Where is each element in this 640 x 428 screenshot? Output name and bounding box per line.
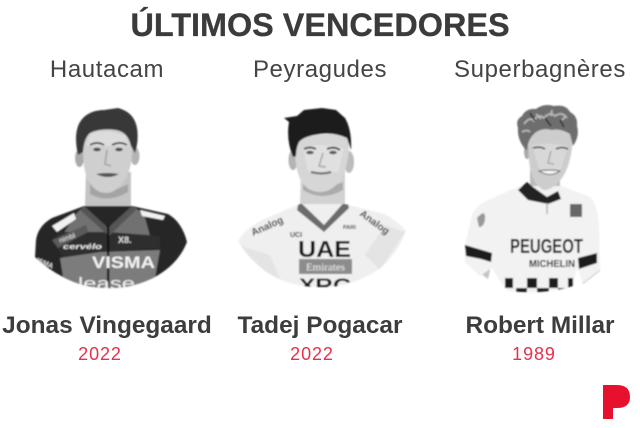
place label: Hautacam: Hautacam [50, 56, 164, 83]
portrait: Tadej Pogacar: Emirates [306, 262, 345, 274]
portrait: Tadej Pogacar: PARI [343, 225, 356, 231]
logo: red P mark [603, 385, 630, 419]
portrait: Robert Millar: PEUGEOT [510, 236, 583, 258]
portrait: Jonas Vingegaard: ISMA [35, 257, 54, 270]
year: 1989: 1989 [512, 344, 556, 364]
place label: Peyragudes: Peyragudes [253, 56, 387, 83]
portrait: Jonas Vingegaard: cervélo [63, 242, 103, 251]
portrait: Tadej Pogacar: Analog [250, 215, 285, 239]
winner name: Tadej Pogacar: Tadej Pogacar [238, 312, 402, 339]
portrait: Jonas Vingegaard: nimbl [58, 232, 77, 245]
portraits [34, 104, 630, 419]
portrait: Tadej Pogacar: UCI [290, 232, 302, 239]
year: 2022: 2022 [290, 344, 334, 364]
portrait: Jonas Vingegaard: X8. [118, 235, 132, 245]
year: 2022: 2022 [78, 344, 122, 364]
portrait: Jonas Vingegaard [30, 108, 195, 295]
portrait: Tadej Pogacar: UAE [298, 236, 351, 262]
portrait: Jonas Vingegaard: VISMA [92, 253, 155, 272]
place label: Superbagnères: Superbagnères [454, 56, 626, 83]
winner name: Robert Millar: Robert Millar [465, 312, 615, 339]
winner name: Jonas Vingegaard: Jonas Vingegaard [2, 312, 212, 339]
portrait: Tadej Pogacar [238, 107, 406, 288]
portrait: Tadej Pogacar: Analog [357, 209, 391, 237]
portrait: Tadej Pogacar: XRG [299, 276, 352, 297]
portrait: Robert Millar: MICHELIN [529, 258, 575, 270]
title: ÚLTIMOS VENCEDORES [130, 7, 510, 43]
portrait: Robert Millar [460, 105, 605, 298]
portrait: Jonas Vingegaard: lease [78, 274, 135, 293]
